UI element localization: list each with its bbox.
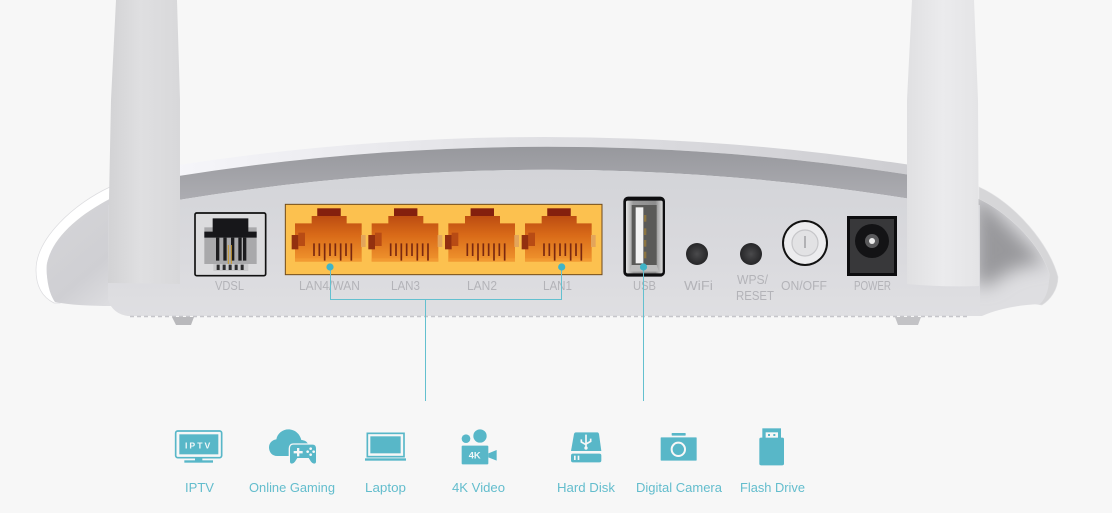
LAN1 socket bbox=[522, 208, 596, 262]
WiFi button bbox=[686, 243, 708, 265]
right wing inner bbox=[978, 199, 1049, 316]
USB port bbox=[623, 197, 665, 277]
caption: Hard Disk: Hard Disk bbox=[557, 481, 616, 495]
label: LAN4/WAN: LAN4/WAN bbox=[299, 279, 360, 293]
icons: LAN devices bbox=[176, 429, 497, 464]
POWER socket bbox=[847, 216, 897, 276]
caption: Digital Camera: Digital Camera bbox=[636, 481, 722, 495]
WPS/RESET button bbox=[740, 243, 762, 265]
label: ON/OFF: ON/OFF bbox=[781, 279, 827, 293]
LAN4/WAN socket bbox=[292, 208, 366, 262]
label: POWER: POWER bbox=[854, 279, 891, 293]
icon: IPTV: IPTV bbox=[185, 440, 212, 450]
LAN4 dot bbox=[326, 263, 334, 271]
left foot bbox=[172, 317, 194, 325]
router bbox=[36, 0, 1060, 325]
USB dot bbox=[640, 263, 647, 271]
bottom vent edge bbox=[130, 316, 970, 318]
label: USB: USB bbox=[633, 279, 656, 293]
right antenna bbox=[907, 0, 979, 286]
label: LAN3: LAN3 bbox=[391, 279, 420, 293]
icon: 4K video: 4K bbox=[469, 451, 481, 461]
label: RESET: RESET bbox=[736, 289, 774, 303]
icon: IPTV bbox=[176, 431, 222, 463]
connector: USB port to devices bbox=[640, 263, 647, 401]
top recess band bbox=[172, 147, 917, 201]
label: WPS/: WPS/ bbox=[737, 273, 769, 287]
device captions bbox=[185, 481, 805, 495]
caption: Laptop: Laptop bbox=[365, 481, 406, 495]
icon: online gaming bbox=[269, 429, 317, 464]
right foot bbox=[895, 317, 921, 325]
icon: digital camera bbox=[661, 433, 697, 461]
LAN1 dot bbox=[558, 263, 565, 271]
LAN3 socket bbox=[368, 208, 442, 262]
caption: 4K Video: 4K Video bbox=[452, 481, 505, 495]
icon: flash drive bbox=[759, 428, 784, 465]
port labels bbox=[299, 273, 891, 303]
label: LAN1: LAN1 bbox=[543, 279, 572, 293]
VDSL port bbox=[195, 213, 266, 276]
right wing rim bbox=[979, 187, 1058, 305]
label: LAN2: LAN2 bbox=[467, 279, 497, 293]
ON/OFF button bbox=[782, 220, 828, 266]
icon: hard disk bbox=[571, 432, 601, 462]
caption: Online Gaming: Online Gaming bbox=[249, 481, 335, 495]
label: VDSL: VDSL bbox=[215, 279, 244, 293]
left wing rim bbox=[36, 187, 110, 303]
label: WiFi: WiFi bbox=[684, 279, 713, 293]
LAN port panel bbox=[285, 204, 602, 275]
connector: LAN ports to devices bbox=[326, 263, 565, 401]
left wing inner bbox=[47, 199, 112, 306]
LAN2 socket bbox=[445, 208, 519, 262]
caption: IPTV: IPTV bbox=[185, 481, 215, 495]
caption: Flash Drive: Flash Drive bbox=[740, 481, 805, 495]
top rim bbox=[172, 137, 917, 177]
icon: laptop bbox=[365, 433, 406, 461]
icons: USB devices bbox=[571, 428, 784, 465]
rear face bbox=[108, 170, 980, 316]
icon: 4K video bbox=[462, 429, 497, 464]
left antenna bbox=[108, 0, 180, 284]
